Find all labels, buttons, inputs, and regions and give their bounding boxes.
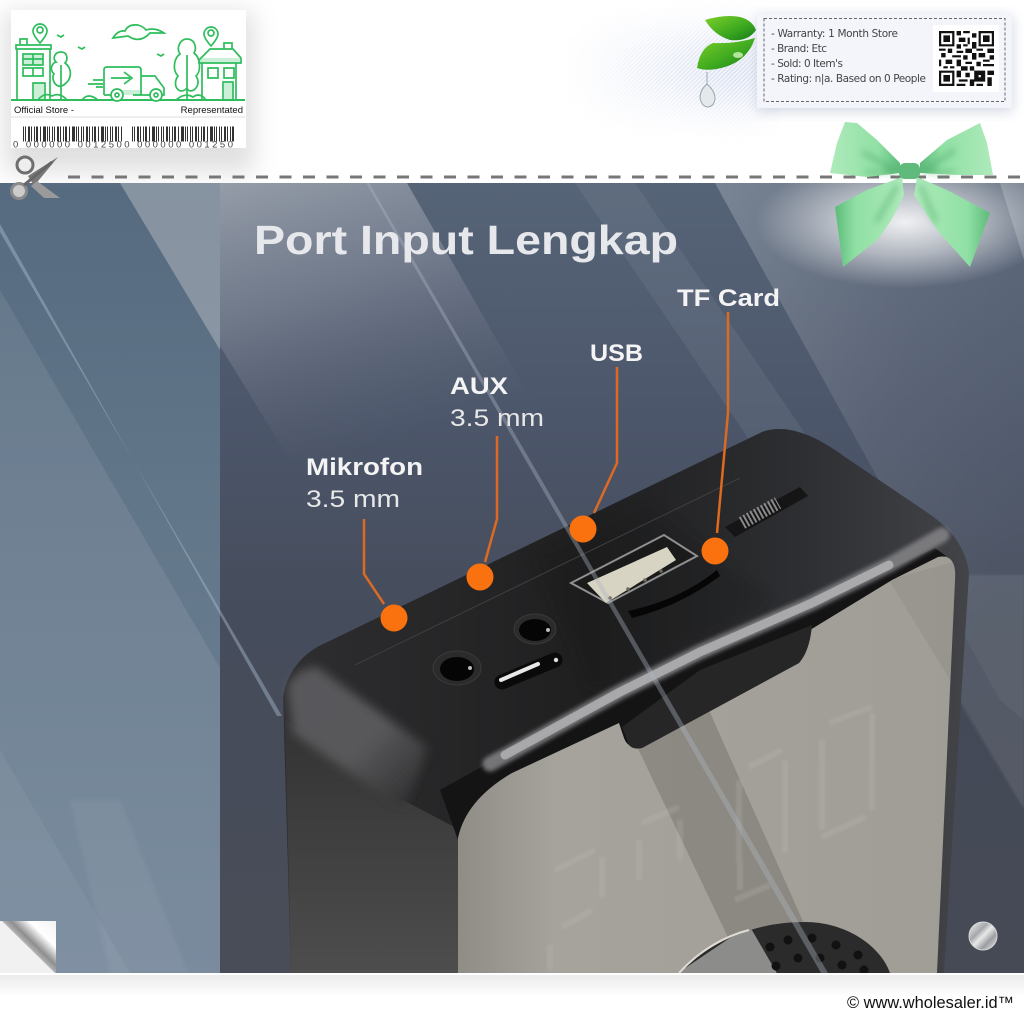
photo panel background [0,156,1024,975]
QR code [933,25,999,92]
lit corner [287,667,427,807]
micro USB slot [501,658,558,682]
darker reflected band [638,712,804,936]
callout: AUX [450,373,544,590]
glittering edge highlight [490,535,942,764]
callout: Mikrofon: Mikrofon [306,454,423,481]
left column light lanes [0,183,220,973]
thin diagonal light line [366,183,828,973]
speaker device [283,429,969,975]
store label [11,10,246,150]
warranty and rating text: - Rating: n|a. Based on 0 People [771,73,926,85]
copyright: © www.wholesaler.id™ [847,994,1014,1012]
info panel [757,14,1013,112]
dark centre shadow on top face [535,505,770,690]
icon: metal button [969,922,997,950]
warranty and rating text: - Warranty: 1 Month Store [771,28,898,40]
cut line [68,176,1024,178]
warranty and rating text: - Sold: 0 Item's [771,58,843,70]
warranty and rating text [771,28,926,85]
callout: TF Card: TF Card [677,285,780,312]
ribbon folds [862,150,955,222]
speaker grille [680,922,890,973]
warranty and rating text: - Brand: Etc [771,43,827,55]
3.5 mm jack right [514,614,556,644]
TF card slot [628,570,720,618]
grey display panel [455,550,960,973]
speaker rim highlight [679,930,749,973]
callout: Mikrofon: 3.5 mm [306,486,400,513]
delivery illustration [11,24,245,101]
footer band [0,973,1024,975]
callout: USB: USB [590,340,643,367]
title: Port Input Lengkap [254,217,678,263]
store name: Official Store - [14,105,74,116]
barcode [23,126,235,142]
callout: USB [570,340,643,542]
green fills [24,55,240,100]
USB port [571,535,697,603]
icon: green leaves with water drop [697,16,756,107]
stripes glow behind info panel [607,21,764,121]
3.5 mm jack left [433,651,481,685]
callout: AUX: 3.5 mm [450,405,544,432]
top left label shadow [4,12,254,172]
icon: scissors [12,157,60,198]
callout: Mikrofon [306,454,423,632]
callout: TF Card [677,285,780,564]
callout: AUX: AUX [450,373,508,400]
front side of body [286,744,458,973]
barcode digits: 0 000000 0012500 000000 001250 [13,140,233,150]
representation text: Representated [181,105,243,116]
icon: green ribbon bow [830,122,993,267]
right column light bands [220,183,1024,972]
tab under edge [622,625,812,749]
thin diagonal left line [0,224,282,716]
icon: page curl [0,921,56,974]
mode switch [725,487,808,537]
ghost display digits [668,780,770,902]
dark front rim [440,548,946,840]
